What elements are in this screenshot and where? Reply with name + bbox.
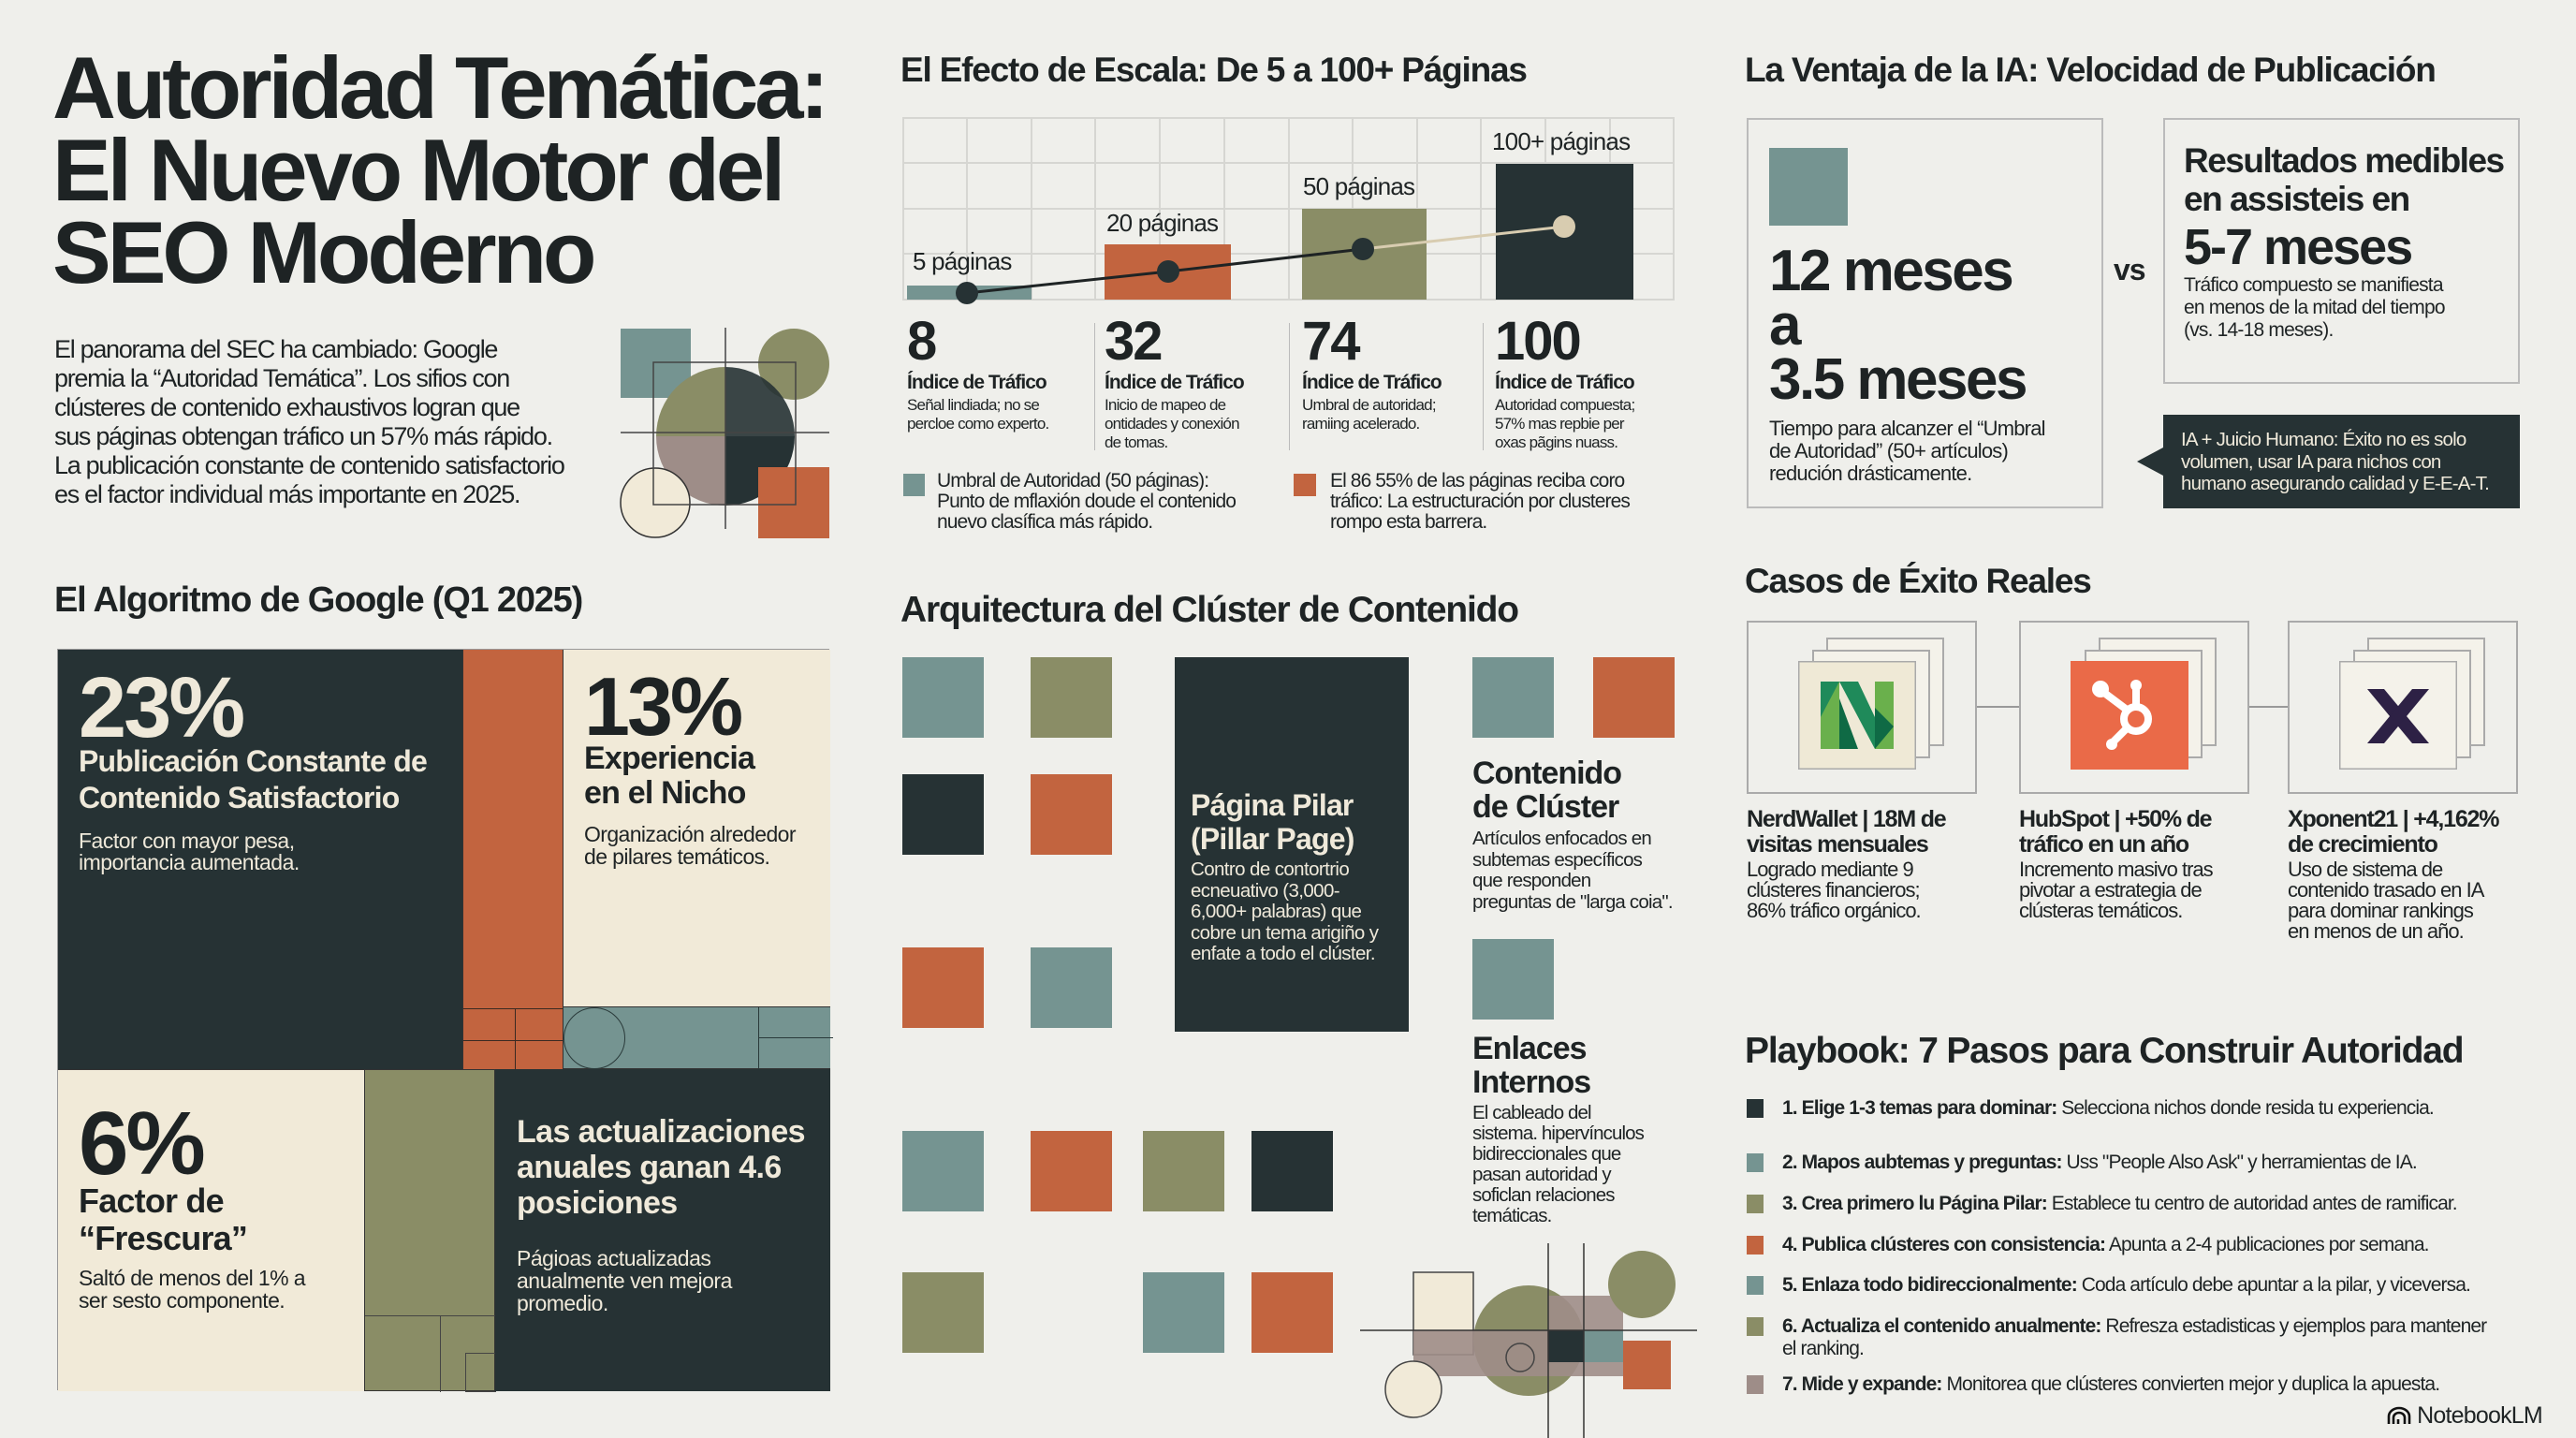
case text: NerdWallet: clústeres financieros; — [1747, 878, 1920, 902]
box: 5-7 meses: Tráfico compuesto se manifiesta — [2184, 274, 2443, 296]
stat 32 — [1105, 311, 1244, 451]
box: 12 meses a 3.5 meses: a — [1769, 293, 1799, 358]
tile: 13%: de pilares temáticos. — [584, 844, 769, 869]
chart: scale effect: 50 páginas — [1303, 172, 1415, 200]
tile: updates: Las actualizaciones — [517, 1114, 805, 1150]
box: 5-7 meses: 5-7 meses — [2184, 219, 2411, 275]
legend: umbral: Punto de mflaxión doude el contenido — [937, 491, 1236, 512]
stat 8: 8 — [907, 311, 935, 372]
intro paragraph: El panorama del SEC ha cambiado: Google — [54, 335, 497, 363]
pillar page block: 6,000+ palabras) que — [1191, 901, 1361, 922]
title: SEO Moderno — [52, 203, 593, 301]
pillar page block: Página Pilar — [1191, 788, 1354, 822]
tile: 13%: Organización alrededor — [584, 822, 796, 846]
stat 32: Índice de Tráfico — [1105, 372, 1244, 393]
stat 74: 74 — [1302, 311, 1359, 372]
stat 32: Inicio de mapeo de — [1105, 396, 1225, 414]
text: contenido de clúster: preguntas de "larga coia". — [1472, 891, 1673, 912]
tile: updates: anualmente ven mejora — [517, 1269, 732, 1293]
legend: umbral: nuevo clasífica más rápido. — [937, 511, 1152, 533]
chart: scale effect: 5 páginas — [913, 247, 1012, 275]
tile: updates: posiciones — [517, 1185, 678, 1221]
icon: HubSpot logo — [2071, 661, 2188, 770]
text: contenido de clúster: que responden — [1472, 870, 1590, 891]
case text: Xponent21: Xponent21 | +4,162% — [2288, 806, 2498, 832]
cluster content squares right — [1472, 657, 1675, 738]
case text: NerdWallet: 86% tráfico orgánico. — [1747, 899, 1921, 922]
title: El Nuevo Motor del — [52, 121, 782, 219]
vs label: vs — [2114, 253, 2145, 286]
case card: HubSpot — [2019, 621, 2249, 794]
box: 5-7 meses: Resultados medibles — [2184, 141, 2504, 180]
intro paragraph: es el factor individual más importante en 2025. — [54, 480, 520, 508]
stat 100: oxas pãgins nuass. — [1495, 433, 1617, 451]
text: enlaces internos: soficlan relaciones — [1472, 1184, 1615, 1206]
tile: 23%: 23% — [79, 660, 242, 756]
tile: updates — [495, 1069, 830, 1391]
text: enlaces internos: Enlaces — [1472, 1031, 1587, 1066]
decorative geometric graphic top-left — [620, 328, 829, 538]
tile: 23%: Factor con mayor pesa, — [79, 829, 295, 853]
case text: Xponent21: para dominar rankings — [2288, 899, 2473, 922]
pillar page block: enfate a todo el clúster. — [1191, 943, 1375, 964]
tile: 23%: importancia aumentada. — [79, 850, 300, 874]
legend: 86%: rompo esta barrera. — [1330, 511, 1486, 533]
case text: Xponent21: contenido trasado en IA — [2288, 878, 2483, 902]
stat 74 — [1302, 311, 1442, 433]
case text: NerdWallet: Logrado mediante 9 — [1747, 858, 1913, 881]
tile: 6%: “Frescura” — [79, 1219, 247, 1257]
heading: arquitectura: Arquitectura del Clúster de Contenido — [900, 590, 1518, 630]
stat 8: percloe como experto. — [907, 415, 1048, 433]
pillar page block: (Pillar Page) — [1191, 822, 1354, 856]
intro paragraph: La publicación constante de contenido satisfactorio — [54, 451, 564, 479]
text: enlaces internos: Internos — [1472, 1064, 1590, 1100]
text: contenido de clúster: Artículos enfocados en — [1472, 828, 1651, 849]
pillar page block — [1175, 657, 1409, 1032]
legend: umbral: Umbral de Autoridad (50 páginas): — [937, 470, 1208, 492]
stat 74: ramiing acelerado. — [1302, 415, 1419, 433]
tile: sage — [364, 1069, 495, 1391]
connector lines — [1977, 706, 2288, 708]
tile: orange column — [462, 650, 563, 1069]
stat 8: Índice de Tráfico — [907, 372, 1046, 393]
chart: scale effect: 20 páginas — [1106, 209, 1219, 237]
tile: 13%: 13% — [584, 660, 740, 753]
case text: HubSpot: Incremento masivo tras — [2019, 858, 2213, 881]
stat 100: Autoridad compuesta; — [1495, 396, 1634, 414]
logo: NotebookLM: NotebookLM — [2417, 1402, 2542, 1429]
legend: 86% — [1294, 470, 1631, 533]
playbook steps list: el ranking. — [1782, 1338, 1864, 1359]
box: 12 meses a 3.5 meses — [1747, 118, 2103, 508]
playbook steps list: 4. Publica clústeres con consistencia: Apunta a 2-4 publicaciones por semana. — [1782, 1234, 2429, 1255]
heading: efecto de escala: El Efecto de Escala: De 5 a 100+ Páginas — [900, 51, 1527, 89]
intro paragraph: sus páginas obtengan tráfico un 57% más rápido. — [54, 422, 552, 450]
stat 32: de tomas. — [1105, 433, 1167, 451]
stat 8: Señal lindiada; no se — [907, 396, 1039, 414]
heading: casos de éxito: Casos de Éxito Reales — [1745, 562, 2091, 600]
legend: 86%: El 86 55% de las páginas reciba coro — [1330, 470, 1624, 492]
stat 8 — [907, 311, 1048, 433]
cluster squares grid — [902, 657, 1333, 1353]
tile: 6%: Saltó de menos del 1% a — [79, 1266, 305, 1290]
text: enlaces internos: bidireccionales que — [1472, 1143, 1620, 1165]
chart: scale effect — [902, 117, 1675, 304]
tile: 23%: Contenido Satisfactorio — [79, 781, 400, 814]
legend: 86%: tráfico: La estructuración por clusteres — [1330, 491, 1630, 512]
pillar page block: cobre un tema arigiño y — [1191, 921, 1378, 944]
stat 74: Índice de Tráfico — [1302, 372, 1442, 393]
playbook steps list: 1. Elige 1-3 temas para dominar: Selecciona nichos donde resida tu experiencia. — [1782, 1097, 2434, 1119]
tile: updates: Págioas actualizadas — [517, 1246, 710, 1270]
tile: teal strip — [563, 1006, 830, 1069]
box: 5-7 meses — [2163, 118, 2520, 384]
callout: IA + juicio humano: humano asegurando calidad y E-E-A-T. — [2181, 473, 2489, 494]
text: enlaces internos: pasan autoridad y — [1472, 1164, 1611, 1185]
tile: 6%: Factor de — [79, 1181, 224, 1220]
box: 12 meses a 3.5 meses: Tiempo para alcanzer el “Umbral — [1769, 417, 2045, 440]
case text: NerdWallet: visitas mensuales — [1747, 831, 1928, 858]
callout: IA + juicio humano — [2163, 415, 2520, 508]
stats row: traffic index — [907, 311, 1634, 451]
text: contenido de clúster: Contenido — [1472, 756, 1621, 791]
case text: HubSpot: tráfico en un año — [2019, 831, 2188, 858]
intro paragraph — [54, 335, 564, 508]
tile: 6% — [58, 1069, 364, 1391]
tile: 6%: ser sesto componente. — [79, 1288, 285, 1313]
box: 12 meses a 3.5 meses: redución drásticamente. — [1769, 462, 1971, 485]
tile: 6%: 6% — [79, 1093, 203, 1194]
stat 74: Umbral de autoridad; — [1302, 396, 1436, 414]
stat 100: 57% mas repbie per — [1495, 415, 1624, 433]
case text: NerdWallet: NerdWallet | 18M de — [1747, 806, 1945, 832]
decorative geometric graphic bottom-middle — [1360, 1243, 1697, 1438]
title — [52, 38, 826, 301]
pillar page block: Contro de contortrio — [1191, 858, 1349, 880]
callout: IA + juicio humano: volumen, usar IA para nichos con — [2181, 451, 2441, 472]
case text: NerdWallet — [1747, 806, 1946, 922]
box: 12 meses a 3.5 meses: de Autoridad” (50+ artículos) — [1769, 439, 2008, 462]
stat 100 — [1495, 311, 1634, 451]
box: 5-7 meses: (vs. 14-18 meses). — [2184, 319, 2333, 341]
pillar page block: ecneuativo (3,000- — [1191, 880, 1339, 901]
stat 32: 32 — [1105, 311, 1162, 372]
icon: Xponent21 logo — [2339, 661, 2457, 770]
heading: ventaja de la IA: La Ventaja de la IA: Velocidad de Publicación — [1745, 51, 2436, 89]
tile: 13% — [563, 650, 830, 1006]
stat 100: 100 — [1495, 311, 1580, 372]
case text: HubSpot: clústeras temáticos. — [2019, 899, 2182, 922]
playbook steps list: 3. Crea primero lu Página Pilar: Establece tu centro de autoridad antes de ramificar. — [1782, 1193, 2457, 1214]
icon: NerdWallet logo — [1798, 661, 1916, 770]
playbook steps list: 5. Enlaza todo bidireccionalmente: Coda artículo debe apuntar a la pilar, y viceversa. — [1782, 1274, 2470, 1296]
treemap: algorithm factors — [57, 649, 829, 1390]
case text: Xponent21: Uso de sistema de — [2288, 858, 2442, 881]
text: enlaces internos: El cableado del — [1472, 1102, 1591, 1123]
case text: HubSpot — [2019, 806, 2213, 922]
box: 5-7 meses: en assisteis en — [2184, 180, 2409, 218]
tile: 23%: Publicación Constante de — [79, 744, 427, 778]
chart: scale effect: 100+ páginas — [1492, 127, 1631, 155]
text: enlaces internos: temáticas. — [1472, 1205, 1551, 1226]
case text: Xponent21: en menos de un año. — [2288, 919, 2464, 943]
box: 12 meses a 3.5 meses: 3.5 meses — [1769, 347, 2026, 412]
playbook steps list: 6. Actualiza el contenido anualmente: Refresza estadisticas y ejemplos para mantener — [1782, 1315, 2486, 1337]
text: contenido de clúster — [1472, 756, 1673, 912]
box: 12 meses a 3.5 meses: 12 meses — [1769, 239, 2012, 303]
text: enlaces internos — [1472, 1031, 1644, 1226]
stat 32: ontidades y conexión — [1105, 415, 1239, 433]
title: Autoridad Temática: — [52, 38, 826, 137]
case text: Xponent21: de crecimiento — [2288, 831, 2437, 858]
text: enlaces internos: sistema. hipervínculos — [1472, 1123, 1644, 1144]
case text: Xponent21 — [2288, 806, 2499, 943]
callout: IA + juicio humano: IA + Juicio Humano: Éxito no es solo — [2181, 429, 2466, 450]
text: contenido de clúster: de Clúster — [1472, 789, 1618, 825]
intro paragraph: clústeres de contenido exhaustivos logran que — [54, 393, 520, 421]
tile: updates: promedio. — [517, 1291, 608, 1315]
case card: NerdWallet — [1747, 621, 1977, 794]
tile: 13%: en el Nicho — [584, 775, 746, 811]
case text: HubSpot: HubSpot | +50% de — [2019, 806, 2211, 832]
heading: algoritmo: El Algoritmo de Google (Q1 2025) — [54, 580, 582, 620]
playbook steps list — [1747, 1097, 2487, 1395]
square: enlaces — [1472, 939, 1554, 1020]
intro paragraph: premia la “Autoridad Temática”. Los sifios con — [54, 364, 509, 392]
tile: 23% — [58, 650, 462, 1069]
legend: umbral — [903, 470, 1236, 533]
tile: 13%: Experiencia — [584, 741, 754, 776]
box: 5-7 meses: en menos de la mitad del tiempo — [2184, 297, 2445, 318]
playbook steps list: 2. Mapos aubtemas y preguntas: Uss "People Also Ask" y herramientas de IA. — [1782, 1152, 2417, 1173]
playbook steps list: 7. Mide y expande: Monitorea que clústeres convierten mejor y duplica la apuesta. — [1782, 1373, 2439, 1395]
text: contenido de clúster: subtemas específicos — [1472, 848, 1642, 871]
stat 100: Índice de Tráfico — [1495, 372, 1634, 393]
case text: HubSpot: pivotar a estrategia de — [2019, 878, 2202, 902]
case card: Xponent21 — [2288, 621, 2518, 794]
heading: playbook: Playbook: 7 Pasos para Construir Autoridad — [1745, 1031, 2463, 1071]
tile: updates: anuales ganan 4.6 — [517, 1150, 782, 1185]
